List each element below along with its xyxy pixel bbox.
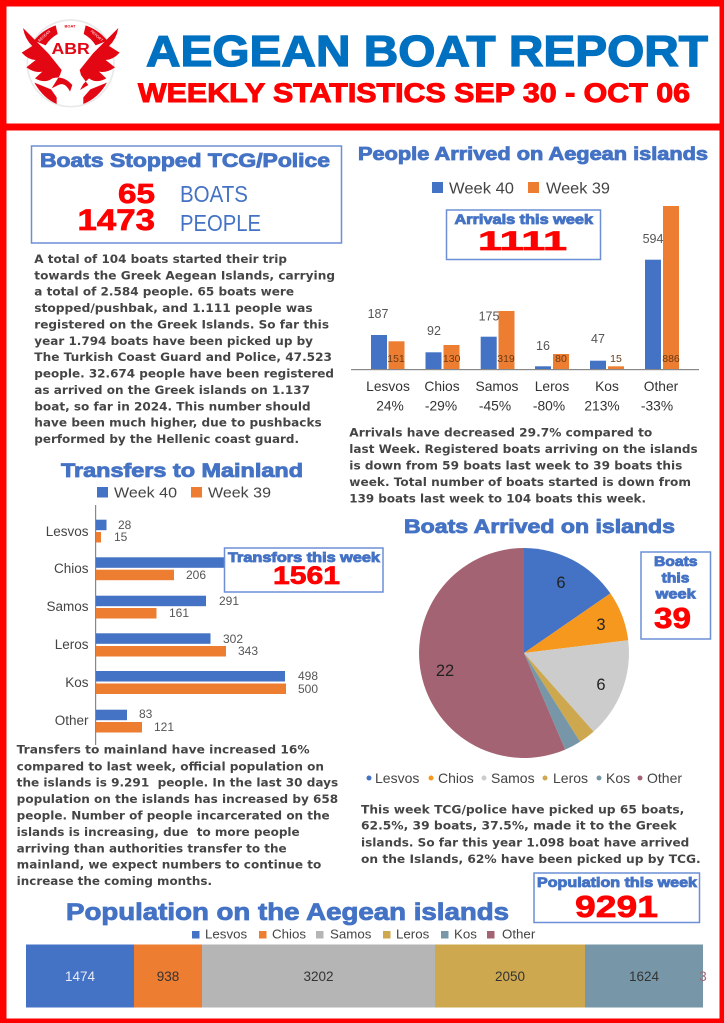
bar chart: transfers: 206 — [186, 568, 206, 582]
stacked bar: population: 1474 — [65, 969, 96, 984]
panel: transfers to mainland — [46, 460, 383, 745]
bar chart: arrivals: Other — [644, 379, 679, 394]
text block: summary: stopped/pushbak, and 1.111 people was — [34, 301, 313, 315]
text block: boats commentary: on the Islands, 62% have been picked up by TCG. — [361, 852, 701, 866]
text block: transfers commentary: population on the islands has increased by 658 — [17, 792, 338, 806]
pie legend: Chios — [438, 770, 474, 786]
text block: transfers commentary: Transfers to mainland have increased 16% — [17, 743, 310, 757]
callout: population this week: 9291 — [575, 889, 658, 924]
text block: transfers commentary: arriving than authorities transfer to the — [17, 841, 287, 855]
stat: people stopped: PEOPLE — [180, 210, 261, 236]
panel: people arrived — [351, 144, 708, 414]
callout: transfers this week — [224, 548, 383, 592]
callout: transfers this week: Transfors this week — [228, 550, 381, 565]
text block: transfers commentary: people. Number of people incarcerated on the — [17, 808, 330, 822]
bar chart: arrivals: 16 — [536, 339, 550, 353]
bar chart: arrivals: 594 — [643, 232, 663, 246]
text block: transfers commentary: the islands is 9.291 people. In the last 30 days — [17, 776, 338, 790]
text block: summary: boat, so far in 2024. This number should — [34, 399, 311, 413]
stacked bar: population: 3202 — [303, 969, 334, 984]
text block: transfers commentary: mainland, we expect numbers to continue to — [17, 858, 321, 872]
text block: summary: a total of 2.584 people. 65 boats were — [34, 285, 294, 299]
bar chart: transfers: Lesvos — [46, 524, 89, 539]
bar chart: arrivals: 92 — [427, 324, 441, 338]
bar chart: transfers: 161 — [169, 606, 189, 620]
bar chart: arrivals: 187 — [368, 307, 388, 321]
pie chart: boats arrived: 6 — [556, 574, 566, 592]
text block: summary: year 1.794 boats have been picked up by — [34, 334, 313, 348]
bar chart: arrivals: 15 — [610, 353, 622, 365]
population legend: Kos — [454, 926, 477, 942]
stat: boats stopped: BOATS — [180, 181, 248, 207]
text block: arrivals commentary: week. Total number of boats started is down from — [349, 475, 691, 489]
text block: summary — [34, 252, 335, 446]
text block: summary: as arrived on the Greek islands on 1.137 — [34, 383, 310, 397]
bar chart: arrivals: 47 — [591, 332, 605, 346]
pie legend: Samos — [491, 770, 535, 786]
text block: summary: The Turkish Coast Guard and Police, 47.523 — [34, 350, 332, 364]
stat: boats stopped — [118, 178, 248, 209]
callout: population this week: Population this week — [537, 875, 698, 890]
text block: boats commentary — [361, 802, 701, 866]
text block: transfers commentary — [17, 743, 338, 888]
pie chart: boats arrived: 3 — [596, 616, 606, 634]
text block: summary: performed by the Hellenic coast guard. — [34, 432, 299, 446]
bar chart: arrivals: 130 — [443, 353, 461, 365]
bar chart: arrivals: -45% — [479, 398, 511, 414]
population legend: Lesvos — [205, 926, 247, 942]
heading: people arrived: People Arrived on Aegean islands — [358, 144, 708, 164]
stacked bar: population: 938 — [157, 969, 179, 984]
bar chart: arrivals: Chios — [424, 379, 460, 394]
bar chart: transfers — [46, 505, 318, 745]
bar chart: arrivals: Leros — [535, 379, 569, 394]
population legend: Other — [502, 926, 536, 942]
logo ring text: aegean: AEGEAN — [37, 29, 52, 43]
stat: boats stopped: 65 — [118, 178, 155, 209]
bar chart: arrivals: Samos — [476, 379, 519, 394]
bar chart: arrivals: 886 — [662, 353, 680, 365]
heading: population: Population on the Aegean islands — [66, 899, 509, 926]
bar chart: transfers: 121 — [154, 720, 174, 734]
chart legend — [432, 180, 610, 198]
chart legend: Week 39 — [208, 484, 271, 502]
bar chart: arrivals: 24% — [376, 398, 404, 414]
title: AEGEAN BOAT REPORT — [146, 27, 708, 76]
bar chart: arrivals: 213% — [584, 398, 620, 414]
callout: arrivals this week: Arrivals this week — [454, 212, 594, 227]
logo ring text: report: REPORT — [90, 29, 104, 43]
stacked bar: population: 3 — [699, 969, 707, 984]
panel: population — [26, 873, 707, 1008]
bar chart: transfers: Leros — [55, 637, 89, 652]
callout: transfers this week: 1561 — [273, 562, 340, 590]
text block: arrivals commentary: last Week. Registered boats arriving on the islands — [349, 442, 698, 456]
bar chart: transfers: 498 — [298, 669, 318, 683]
header — [22, 20, 708, 108]
chart legend: Week 39 — [546, 180, 610, 198]
bar chart: arrivals: 80 — [555, 353, 567, 365]
panel: boats stopped — [32, 146, 342, 243]
heading: transfers: Transfers to Mainland — [61, 460, 303, 482]
bar chart: arrivals: -29% — [425, 398, 457, 414]
population legend: Leros — [396, 926, 430, 942]
pie legend: Leros — [553, 770, 588, 786]
callout: boats this week — [641, 552, 710, 639]
bar chart: arrivals: 175 — [479, 310, 499, 324]
subtitle: WEEKLY STATISTICS SEP 30 - OCT 06 — [138, 78, 690, 108]
bar chart: arrivals: Lesvos — [366, 379, 410, 394]
logo ring text: boat: BOAT — [64, 24, 76, 29]
icon: ABR eagle and lifebuoy logo — [22, 20, 120, 107]
bar chart: transfers: 343 — [238, 644, 258, 658]
pie legend: Lesvos — [375, 770, 419, 786]
heading: boats arrived: Boats Arrived on islands — [404, 517, 675, 538]
bar chart: arrivals: -33% — [641, 398, 673, 414]
stacked bar: population: 1624 — [629, 969, 660, 984]
stacked bar: population — [26, 944, 707, 1008]
text block: boats commentary: 62.5%, 39 boats, 37.5%, made it to the Greek — [361, 819, 678, 833]
callout: boats this week: 39 — [654, 603, 691, 635]
callout: boats this week: week — [654, 587, 696, 602]
bar chart: transfers: 83 — [139, 707, 153, 721]
text block: arrivals commentary: Arrivals have decreased 29.7% compared to — [349, 426, 652, 440]
chart legend: Week 40 — [449, 180, 514, 198]
text block: arrivals commentary — [349, 426, 698, 506]
bar chart: arrivals: 151 — [387, 353, 405, 365]
text block: boats commentary: This week TCG/police have picked up 65 boats, — [361, 802, 684, 816]
text block: summary: have been much higher, due to pushbacks — [34, 416, 322, 430]
callout: population this week — [534, 873, 700, 924]
bar chart: transfers: Kos — [65, 675, 89, 690]
bar chart: arrivals: -80% — [533, 398, 565, 414]
pie chart: boats arrived — [419, 548, 629, 758]
text block: transfers commentary: compared to last week, official population on — [17, 759, 324, 773]
pie legend — [366, 770, 682, 786]
text block: summary: A total of 104 boats started their trip — [34, 252, 287, 266]
pie legend: Other — [647, 770, 682, 786]
callout: arrivals this week — [446, 210, 600, 260]
callout: boats this week: this — [662, 570, 689, 585]
bar chart: transfers: 28 — [118, 518, 132, 532]
stat: people stopped — [78, 204, 261, 237]
text block: summary: towards the Greek Aegean Islands, carrying — [34, 268, 335, 282]
bar chart: transfers: Samos — [46, 599, 89, 614]
text block: summary: registered on the Greek Islands. So far this — [34, 318, 329, 332]
callout: arrivals this week: 1111 — [478, 226, 567, 256]
bar chart: arrivals: 319 — [497, 353, 515, 365]
population legend — [192, 926, 536, 942]
text block: boats commentary: islands. So far this year 1.098 boat have arrived — [361, 835, 689, 849]
population legend: Chios — [272, 926, 306, 942]
bar chart: transfers: 302 — [223, 632, 243, 646]
text block: arrivals commentary: is down from 59 boats last week to 39 boats this — [349, 459, 682, 473]
bar chart: transfers: 291 — [219, 594, 239, 608]
logo wordmark: ABR — [51, 41, 90, 58]
text block: transfers commentary: islands is increasing, due to more people — [17, 825, 300, 839]
population legend: Samos — [330, 926, 372, 942]
pie legend: Kos — [606, 770, 630, 786]
bar chart: transfers: Other — [55, 713, 89, 728]
text block: transfers commentary: increase the coming months. — [17, 874, 212, 888]
text block: summary: people. 32.674 people have been registered — [34, 367, 334, 381]
bar chart: arrivals: Kos — [595, 379, 619, 394]
panel: boats arrived — [366, 517, 710, 786]
bar chart: arrivals — [351, 206, 699, 414]
heading: boats stopped: Boats Stopped TCG/Police — [40, 151, 330, 172]
chart legend: Week 40 — [114, 484, 177, 502]
bar chart: transfers: 500 — [298, 682, 318, 696]
stacked bar: population: 2050 — [495, 969, 525, 984]
callout: boats this week: Boats — [654, 554, 698, 569]
text block: arrivals commentary: 139 boats last week to 104 boats this week. — [349, 492, 646, 506]
pie chart: boats arrived: 22 — [436, 662, 454, 680]
pie chart: boats arrived: 6 — [596, 676, 606, 694]
bar chart: transfers: Chios — [54, 561, 89, 576]
chart legend — [97, 484, 271, 502]
bar chart: transfers: 15 — [114, 530, 128, 544]
stat: people stopped: 1473 — [78, 204, 155, 237]
